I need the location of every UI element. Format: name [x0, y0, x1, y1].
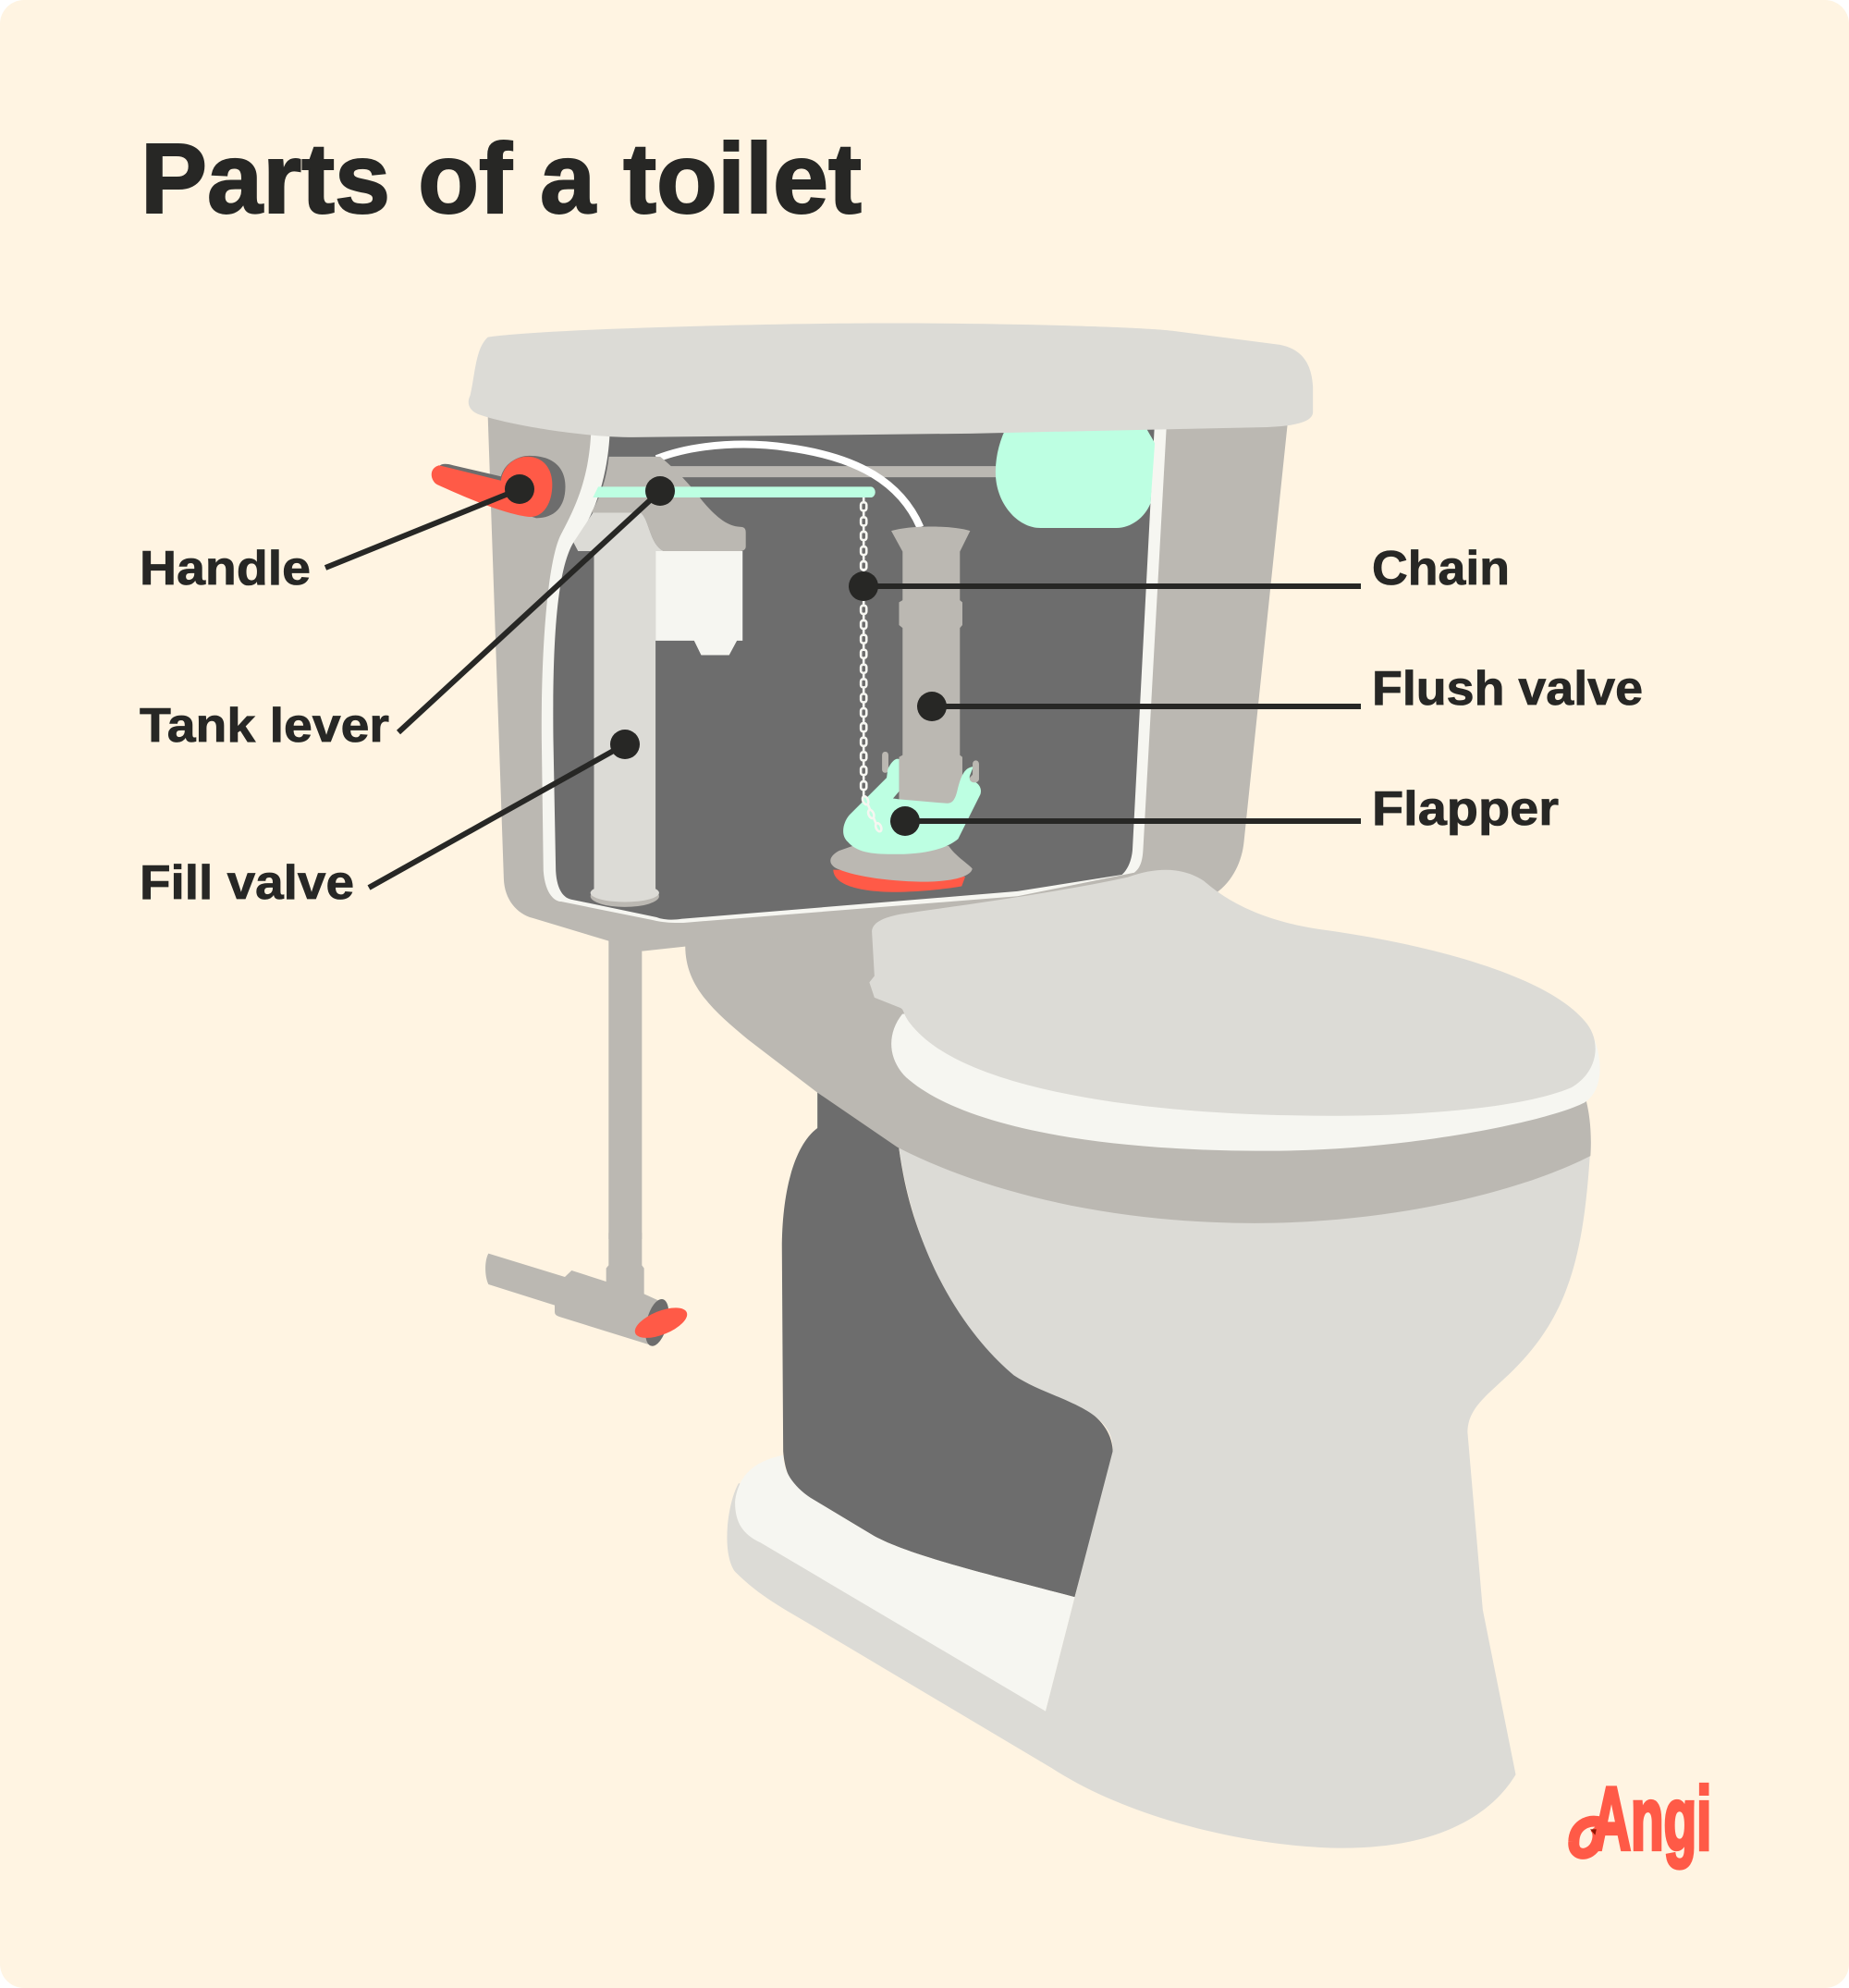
white base plate: [735, 1455, 1074, 1712]
callout: chain: [849, 542, 1510, 601]
callout: flush valve: [917, 662, 1643, 721]
chain: [861, 497, 883, 833]
fill valve head: [591, 457, 746, 551]
tank lever arm: [593, 486, 876, 497]
flapper: [843, 759, 981, 854]
fill valve cap: [573, 513, 664, 551]
toilet seat: [891, 988, 1600, 1151]
float rod: [671, 466, 999, 477]
callout: tank lever: Tank lever: [140, 699, 389, 753]
flapper seat: [830, 846, 973, 882]
float ball: [996, 424, 1155, 528]
logo: Angi: Angi: [1592, 1769, 1711, 1869]
callout: flush valve: Flush valve: [1372, 662, 1643, 716]
fill valve base: [591, 886, 659, 907]
bowl and base: [727, 1135, 1590, 1848]
tank interior: [553, 421, 1155, 920]
flapper peg: [970, 760, 979, 782]
bowl interior cutaway: [782, 1084, 1113, 1597]
logo: Angi: [1573, 1769, 1711, 1869]
tank cutaway: [542, 421, 1167, 923]
fill valve body: [594, 548, 655, 893]
float cup: [655, 551, 742, 656]
callout: chain: Chain: [1372, 542, 1510, 595]
supply pipe and shut-off valve: [485, 925, 692, 1348]
callout: tank lever: [140, 476, 675, 753]
tank lid: [469, 324, 1313, 437]
flapper seal: [833, 870, 965, 892]
callout: handle: [140, 474, 534, 595]
refill hose: [656, 445, 920, 527]
callout: handle: Handle: [140, 542, 311, 595]
tank body: [488, 417, 1288, 951]
callout: fill valve: [140, 730, 640, 910]
flush valve tube: [891, 526, 970, 804]
illustration: toilet: [432, 324, 1600, 1848]
callout: flapper: Flapper: [1372, 782, 1559, 836]
callout: flapper: [890, 782, 1559, 836]
flush valve and flapper: [830, 497, 981, 892]
title: Parts of a toilet: [141, 122, 862, 234]
tank wall lining: [542, 421, 1167, 923]
handle: [432, 456, 565, 518]
callout: fill valve: Fill valve: [140, 856, 354, 910]
toilet lid: [869, 870, 1596, 1116]
toilet neck and rim: [685, 913, 1591, 1223]
overflow pegs: [882, 752, 888, 773]
